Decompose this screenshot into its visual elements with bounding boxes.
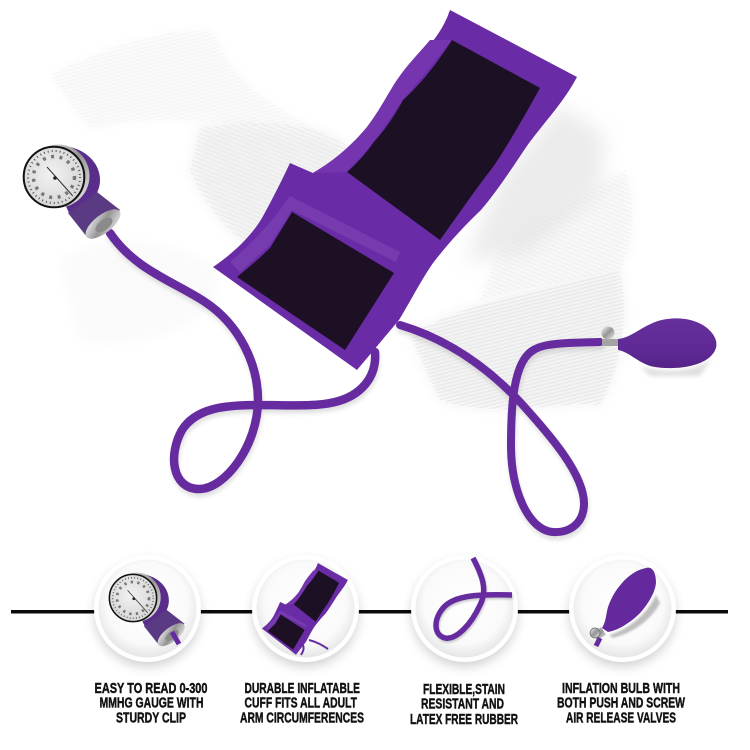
- caption: bulb: [557, 681, 685, 727]
- caption: gauge: MMHG GAUGE WITH: [100, 696, 204, 712]
- feature 1: gauge: [94, 555, 208, 727]
- caption: bulb: INFLATION BULB WITH: [562, 681, 680, 697]
- tube from gauge to cuff: [110, 233, 376, 493]
- caption: tubing: FLEXIBLE,STAIN: [423, 682, 505, 698]
- cuff: [213, 10, 577, 370]
- timeline line: [11, 610, 728, 614]
- gauge: [24, 144, 125, 244]
- caption: gauge: [94, 681, 208, 727]
- caption: cuff: DURABLE INFLATABLE: [244, 681, 360, 697]
- caption: cuff: CUFF FITS ALL ADULT: [244, 696, 357, 712]
- caption: tubing: [410, 682, 518, 728]
- inflation bulb: [602, 318, 716, 376]
- caption: tubing: LATEX FREE RUBBER: [410, 712, 518, 728]
- feature 2: cuff: [240, 555, 364, 727]
- cuff shadow: [465, 105, 605, 262]
- caption: bulb: BOTH PUSH AND SCREW: [557, 696, 685, 712]
- caption: tubing: RESISTANT AND: [421, 697, 504, 713]
- tube from cuff to bulb: [400, 325, 601, 536]
- background wave pattern: [50, 31, 633, 409]
- feature 4: bulb: [557, 555, 685, 727]
- caption: gauge: STURDY CLIP: [116, 711, 186, 727]
- caption: gauge: EASY TO READ 0-300: [94, 681, 208, 697]
- feature 3: tubing: [410, 555, 518, 728]
- caption: cuff: ARM CIRCUMFERENCES: [240, 711, 364, 727]
- caption: bulb: AIR RELEASE VALVES: [566, 711, 676, 727]
- caption: cuff: [240, 681, 364, 727]
